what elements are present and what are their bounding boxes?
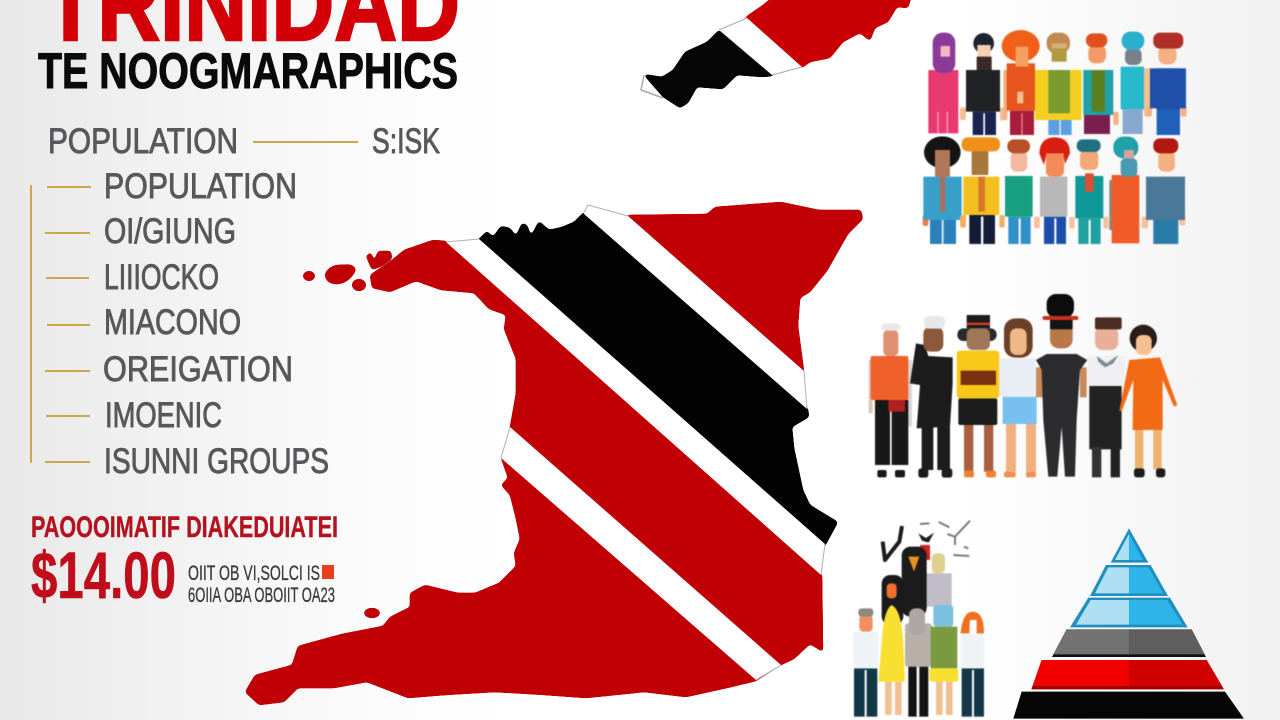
callout note: OIIT OB VI,SOLCI IS (188, 562, 320, 585)
person in lilac (926, 553, 952, 607)
adult 3 yellow top (957, 315, 999, 477)
white band upper (584, 205, 807, 409)
tier 4 gray (1052, 629, 1206, 657)
list item: fourth: MIACONO (104, 303, 241, 342)
tier 5 red (1031, 660, 1224, 689)
person row 2 figure 7 (1146, 138, 1185, 244)
callout note: 6OIIA OBA OBOIIT OA23 (188, 584, 335, 607)
white band middle (446, 239, 825, 575)
northwest islets (303, 251, 392, 618)
callout number: $14.00 (31, 538, 176, 612)
woman with green dress (929, 605, 958, 715)
heading row: population: POPULATION (48, 122, 238, 161)
tall person in black (902, 545, 930, 617)
adult 2 black outfit (910, 316, 953, 478)
person row 2 figure 6 (1109, 137, 1148, 243)
adult 1 orange vest (869, 323, 912, 477)
adult 4 blue skirt (999, 318, 1037, 477)
left man (853, 608, 878, 717)
right man (961, 612, 984, 717)
gray haired woman (905, 608, 932, 717)
map: Trinidad island in flag colours (245, 202, 863, 705)
person row 2 figure 2 (960, 137, 1005, 244)
tier 6 black (1013, 692, 1244, 719)
person row 1 figure 6 (1121, 32, 1151, 134)
tier 2 blue (1090, 565, 1168, 596)
person row 1 figure 2 (960, 33, 1004, 135)
list item: third: LIIIOCKO (104, 258, 219, 297)
adult 7 orange dress (1119, 325, 1177, 477)
list item: sixth: IMOENIC (105, 396, 222, 435)
person with dark hair (882, 575, 903, 625)
person row 2 figure 4 (1039, 137, 1075, 244)
subtitle: demographics: TE NOOGMARAPHICS (38, 43, 458, 99)
illustration: group of seven adults (869, 294, 1177, 478)
heading row: population: S:ISK (372, 122, 440, 161)
person row 1 figure 4 (1035, 33, 1082, 135)
callout heading: PAOOOIMATIF DIAKEDUIATEI (31, 511, 338, 544)
adult 5 top hat (1036, 294, 1087, 477)
pyramid chart (1013, 528, 1244, 719)
list item: groups: ISUNNI GROUPS (104, 442, 329, 481)
list item: second: OI/GIUNG (104, 212, 236, 251)
yellow dress woman (878, 605, 905, 715)
list item: fifth: OREIGATION (103, 350, 293, 389)
bird dark (918, 533, 934, 543)
person row 2 figure 5 (1075, 139, 1109, 244)
person row 2 figure 3 (1005, 139, 1040, 244)
person row 1 figure 5 (1083, 33, 1119, 134)
callout: price stat (31, 511, 338, 612)
adult 6 white shirt (1087, 317, 1125, 477)
person row 1 figure 7 (1147, 33, 1187, 135)
tier 1 tip (1111, 528, 1148, 563)
tier 3 blue (1070, 598, 1188, 627)
person row 1 figure 3 (1002, 30, 1040, 135)
callout note (188, 562, 335, 607)
northeast red corner (622, 202, 863, 382)
white band lower (501, 427, 781, 680)
illustration: crowd of people (853, 521, 984, 717)
red island body (245, 240, 823, 705)
category list (31, 167, 329, 481)
decorative birds (920, 521, 970, 556)
person row 1 figure 1 (928, 33, 958, 133)
person row 2 figure 1 (923, 136, 962, 244)
heading row: population (48, 122, 440, 161)
black diagonal band (470, 212, 838, 556)
raised arm (883, 526, 902, 560)
map: Tobago island in flag colours (641, 0, 915, 108)
list item: population: POPULATION (104, 167, 297, 206)
illustration: diverse people two rows (923, 30, 1187, 244)
